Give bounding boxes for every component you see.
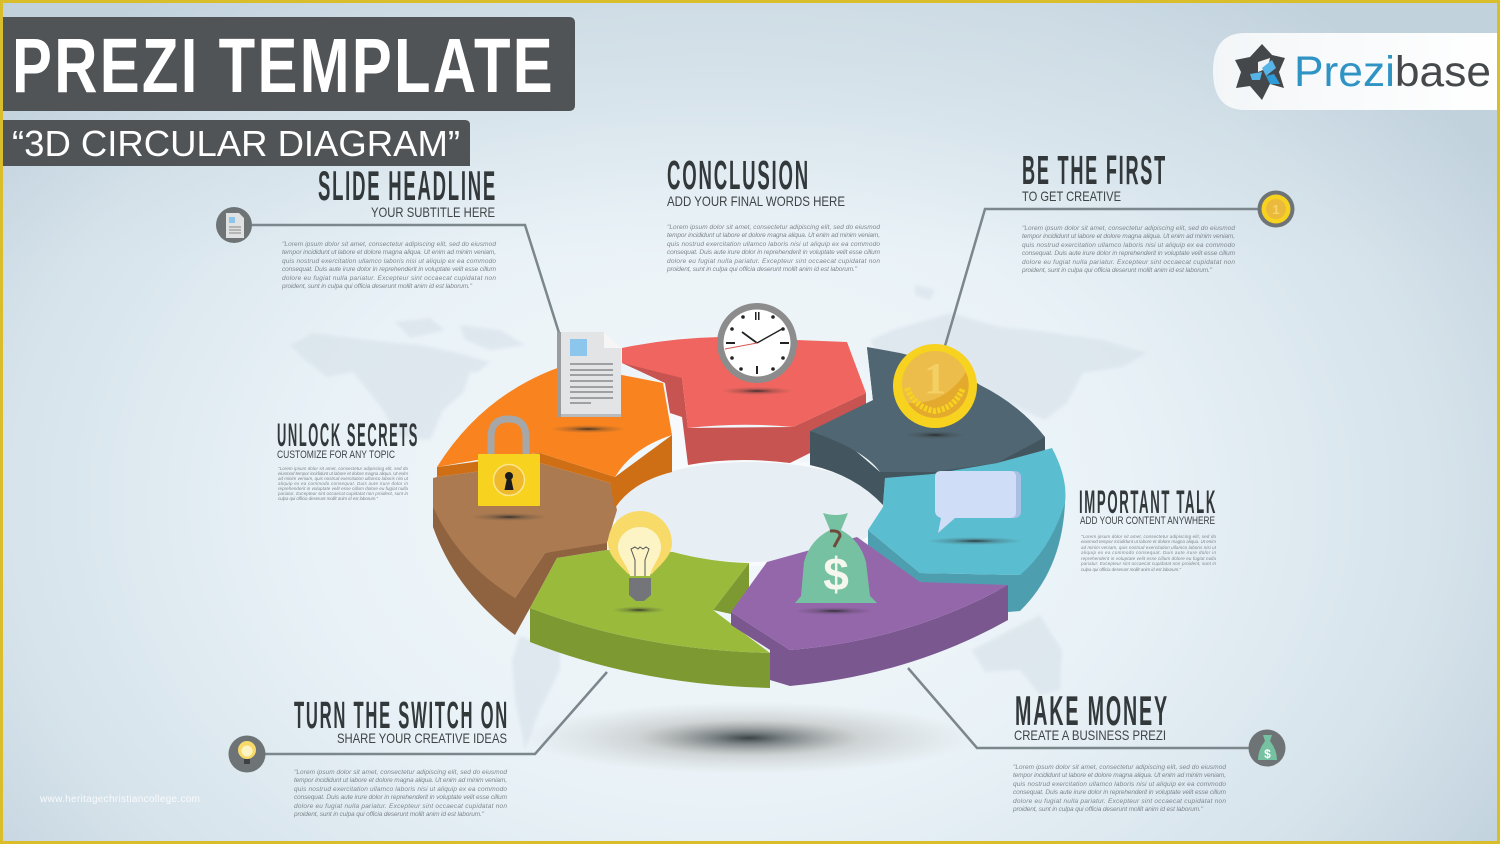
body text	[1021, 225, 1236, 274]
map center: hole of the ring	[612, 410, 888, 564]
body text	[281, 241, 497, 290]
icon: light bulb	[608, 511, 672, 614]
body text: pariatur. Excepteur sint occaecat cupidatat non proident, sunt in	[277, 491, 408, 496]
body text	[277, 466, 409, 501]
body text: "Lorem ipsum dolor sit amet, consectetur adipiscing elit, sed do	[278, 466, 408, 471]
segment: brown	[433, 463, 617, 635]
icon: document badge	[216, 207, 252, 243]
body text: quis nostrud exercitation ullamco laboris nisi ut aliquip ex ea commodo	[1013, 781, 1226, 788]
connector line: slide headline	[252, 225, 560, 336]
body text: proident, sunt in culpa qui officia deserunt mollit anim id est laborum."	[1012, 806, 1204, 813]
subheading: TO GET CREATIVE	[1022, 188, 1121, 204]
ground shadow	[524, 702, 974, 774]
body text: ad minim veniam, quis nostrud exercitation ullamco laboris nisi ut	[1081, 545, 1217, 550]
subheading: CUSTOMIZE FOR ANY TOPIC	[277, 449, 395, 461]
icon: padlock	[471, 419, 547, 521]
body text: aliquip ex ea commodo consequat. Duis aute irure dolor in	[1081, 550, 1216, 555]
body text: reprehenderit in voluptate velit esse cillum dolore eu fugiat nulla	[1081, 556, 1216, 561]
body text: proident, sunt in culpa qui officia deserunt mollit anim id est laborum."	[1021, 267, 1213, 274]
connector line: be the first	[945, 209, 1258, 346]
body text: quis nostrud exercitation ullamco laboris nisi ut aliquip ex ea commodo	[294, 786, 507, 793]
body text: "Lorem ipsum dolor sit amet, consectetur adipiscing elit, sed do eiusmod	[282, 241, 496, 248]
body text: consequat. Duis aute irure dolor in reprehenderit in voluptate velit esse cillum	[282, 266, 497, 273]
body text: consequat. Duis aute irure dolor in reprehenderit in voluptate velit esse cillum	[667, 249, 881, 256]
body text	[1080, 534, 1217, 572]
text: SLIDE HEADLINE	[318, 162, 497, 209]
body text: proident, sunt in culpa qui officia deserunt mollit anim id est laborum."	[281, 283, 473, 290]
text: IMPORTANT TALK	[1079, 484, 1217, 520]
body text: quis nostrud exercitation ullamco laboris nisi ut aliquip ex ea commodo	[1022, 242, 1235, 249]
icon: bulb badge	[228, 736, 266, 772]
body text: "Lorem ipsum dolor sit amet, consectetur adipiscing elit, sed do eiusmod	[1013, 764, 1226, 771]
callout: make money	[1012, 687, 1286, 813]
callout: be the first	[1021, 147, 1294, 274]
callout: slide headline	[216, 162, 497, 290]
connector line: turn the switch on	[265, 672, 607, 754]
body text: consequat. Duis aute irure dolor in reprehenderit in voluptate velit esse cillum	[294, 794, 508, 801]
body text: culpa qui officia deserunt mollit anim id est laborum."	[278, 496, 378, 501]
segment: orange	[437, 367, 672, 508]
body text: dolore eu fugiat nulla pariatur. Excepteur sint occaecat cupidatat non	[667, 258, 880, 265]
body text: eiusmod tempor incididunt ut labore et dolore magna aliqua. Ut enim	[1081, 539, 1216, 544]
segment: teal	[868, 448, 1065, 612]
body text: dolore eu fugiat nulla pariatur. Excepteur sint occaecat cupidatat non	[282, 275, 496, 282]
body text	[293, 769, 508, 818]
callout: conclusion: CONCLUSION	[667, 152, 810, 198]
body text: "Lorem ipsum dolor sit amet, consectetur adipiscing elit, sed do	[1081, 534, 1216, 539]
icon: gold coin: 1	[924, 354, 946, 403]
body text: "Lorem ipsum dolor sit amet, consectetur adipiscing elit, sed do eiusmod	[294, 769, 507, 776]
logo: Prezibase	[1213, 33, 1500, 110]
body text: eiusmod tempor incididunt ut labore et dolore magna aliqua. Ut enim	[278, 471, 408, 476]
icon: clock	[717, 303, 797, 395]
icon: document	[550, 332, 626, 433]
title text: PREZI TEMPLATE	[12, 23, 555, 109]
3D circular diagram	[433, 337, 1065, 688]
segment: green	[530, 550, 770, 688]
icon: money bag badge	[1248, 730, 1286, 766]
body text: dolore eu fugiat nulla pariatur. Excepteur sint occaecat cupidatat non	[1022, 259, 1235, 266]
body text: tempor incididunt ut labore et dolore magna aliqua. Ut enim ad minim veniam,	[294, 777, 507, 784]
body text: tempor incididunt ut labore et dolore magna aliqua. Ut enim ad minim veniam,	[282, 249, 496, 256]
body text: pariatur. Excepteur sint occaecat cupidatat non proident, sunt in	[1080, 561, 1216, 566]
text: UNLOCK SECRETS	[277, 417, 419, 453]
icon: money bag	[794, 513, 877, 615]
icon: money bag badge: $	[1264, 747, 1271, 761]
text: TURN THE SWITCH ON	[294, 695, 509, 737]
body text: "Lorem ipsum dolor sit amet, consectetur adipiscing elit, sed do eiusmod	[1022, 225, 1235, 232]
body text: dolore eu fugiat nulla pariatur. Excepteur sint occaecat cupidatat non	[294, 803, 507, 810]
body text: ad minim veniam, quis nostrud exercitation ullamco laboris nisi ut	[278, 476, 409, 481]
body text: tempor incididunt ut labore et dolore magna aliqua. Ut enim ad minim veniam,	[1013, 772, 1226, 779]
body text: dolore eu fugiat nulla pariatur. Excepteur sint occaecat cupidatat non	[1013, 798, 1226, 805]
body text	[1012, 764, 1227, 813]
subheading: YOUR SUBTITLE HERE	[371, 204, 495, 220]
segment: purple	[731, 537, 1008, 686]
icon: gold coin	[893, 344, 977, 439]
logo mark	[1235, 44, 1285, 100]
icon: coin badge	[1258, 190, 1294, 228]
body text: quis nostrud exercitation ullamco laboris nisi ut aliquip ex ea commodo	[667, 241, 880, 248]
segment: slate	[810, 347, 1045, 505]
subheading: CREATE A BUSINESS PREZI	[1014, 727, 1166, 743]
body text: reprehenderit in voluptate velit esse cillum dolore eu fugiat nulla	[278, 486, 408, 491]
connector line: make money	[908, 668, 1249, 748]
body text: proident, sunt in culpa qui officia deserunt mollit anim id est laborum."	[293, 811, 485, 818]
icon: speech bubble	[927, 471, 1023, 545]
body text: proident, sunt in culpa qui officia deserunt mollit anim id est laborum."	[666, 266, 858, 273]
body text: culpa qui officia deserunt mollit anim id est laborum."	[1081, 567, 1181, 572]
callout: be the first: BE THE FIRST	[1022, 147, 1167, 193]
body text: consequat. Duis aute irure dolor in reprehenderit in voluptate velit esse cillum	[1022, 250, 1236, 257]
callout: make money: MAKE MONEY	[1015, 687, 1169, 734]
body text: consequat. Duis aute irure dolor in reprehenderit in voluptate velit esse cillum	[1013, 789, 1227, 796]
body text: tempor incididunt ut labore et dolore magna aliqua. Ut enim ad minim veniam,	[1022, 233, 1235, 240]
logo wordmark: Prezibase	[1294, 48, 1491, 96]
body text	[666, 224, 881, 273]
body text: aliquip ex ea commodo consequat. Duis aute irure dolor in	[278, 481, 408, 486]
icon: money bag: $	[823, 548, 849, 600]
subheading: ADD YOUR CONTENT ANYWHERE	[1080, 515, 1215, 527]
icon: coin badge: 1	[1272, 202, 1280, 217]
subheading: SHARE YOUR CREATIVE IDEAS	[337, 730, 507, 746]
watermark: www.heritagechristiancollege.com	[39, 794, 200, 805]
body text: quis nostrud exercitation ullamco laboris nisi ut aliquip ex ea commodo	[282, 258, 496, 265]
body text: "Lorem ipsum dolor sit amet, consectetur adipiscing elit, sed do eiusmod	[667, 224, 880, 231]
world map	[290, 285, 1147, 750]
title banner	[3, 17, 575, 111]
callout: conclusion	[666, 152, 881, 273]
subtitle text: “3D CIRCULAR DIAGRAM”	[12, 123, 460, 164]
callout: important talk	[1079, 484, 1217, 572]
callout: unlock secrets	[277, 417, 419, 501]
subheading: ADD YOUR FINAL WORDS HERE	[667, 193, 845, 209]
subtitle banner	[3, 120, 470, 166]
segment: red	[622, 337, 866, 465]
body text: tempor incididunt ut labore et dolore magna aliqua. Ut enim ad minim veniam,	[667, 232, 880, 239]
callout: turn the switch on	[228, 695, 509, 818]
